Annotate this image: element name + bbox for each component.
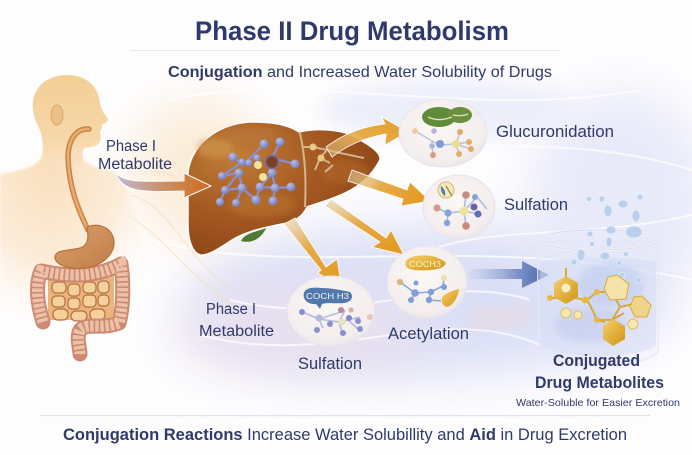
water [540,258,656,356]
molecule [433,191,487,230]
glass [537,241,659,366]
arrow to acetylation [325,199,404,255]
arrow to glucuronidation [326,117,408,157]
head [33,75,108,166]
torso [0,152,141,345]
label: Phase I Metabolite (lower): Metabolite [199,323,274,340]
icon: gold wedge [442,289,459,307]
label: conjugated drug metabolites: Water-Soluble for Easier Excretion [516,397,680,409]
ear [51,105,63,125]
molecule on liver [216,138,300,207]
arrow to lower sulfation [284,218,342,288]
beaker with conjugated metabolites [537,194,659,366]
label: sulfation right: Sulfation [504,196,568,214]
panel: lower sulfation disc [287,276,375,346]
icon: green enzyme [422,107,472,127]
panel: sulfation disc [423,175,495,239]
title divider [130,50,560,51]
icon: COCH3 gold tag: COCH3 [409,260,442,269]
subtitle: Conjugation and Increased Water Solubility of Drugs [168,64,552,81]
icon: blue and gold badge [438,182,454,198]
label: glucuronidation: Glucuronidation [496,123,614,141]
arrow: phase I into liver [116,172,211,198]
label: acetylation: Acetylation [388,325,469,343]
panel: glucuronidation disc [399,99,487,167]
title: Phase II Drug Metabolism [195,16,509,46]
stomach [55,225,114,268]
panel: acetylation disc [387,246,467,318]
label: conjugated drug metabolites: Drug Metabolites [535,373,664,392]
gold molecule [547,268,651,346]
leaf: gallbladder [241,228,266,242]
human figure with digestive tract [0,75,141,354]
small intestine [48,270,114,320]
esophagus [68,129,89,230]
molecule [397,275,447,303]
liver [188,122,380,255]
pale molecule on right lobe [303,144,364,172]
arrow to sulfation [348,170,430,206]
label: Phase I Metabolite (lower): Phase I [206,301,256,318]
icon: COCH H3 blue cloud: COCH H3 [306,291,349,301]
bottom divider [40,415,650,416]
large intestine [37,264,123,354]
molecule [299,307,373,336]
water drops [571,194,643,283]
label: conjugated drug metabolites: Conjugated [553,351,640,370]
molecule [412,128,474,158]
arrows to conjugation reactions [284,117,430,288]
rim [537,230,659,250]
label: sulfation lower: Sulfation [298,355,362,373]
label: Phase I Metabolite (top) [98,138,172,173]
label: Phase I Metabolite (top): Phase I [106,138,156,155]
label: conjugated drug metabolites [516,351,680,409]
label: Phase I Metabolite (lower) [199,301,274,340]
label: Phase I Metabolite (top): Metabolite [98,156,172,173]
arrow: to beaker [470,261,549,288]
bottom caption: Conjugation Reactions Increase Water Solubillity and Aid in Drug Excretion [63,425,627,444]
